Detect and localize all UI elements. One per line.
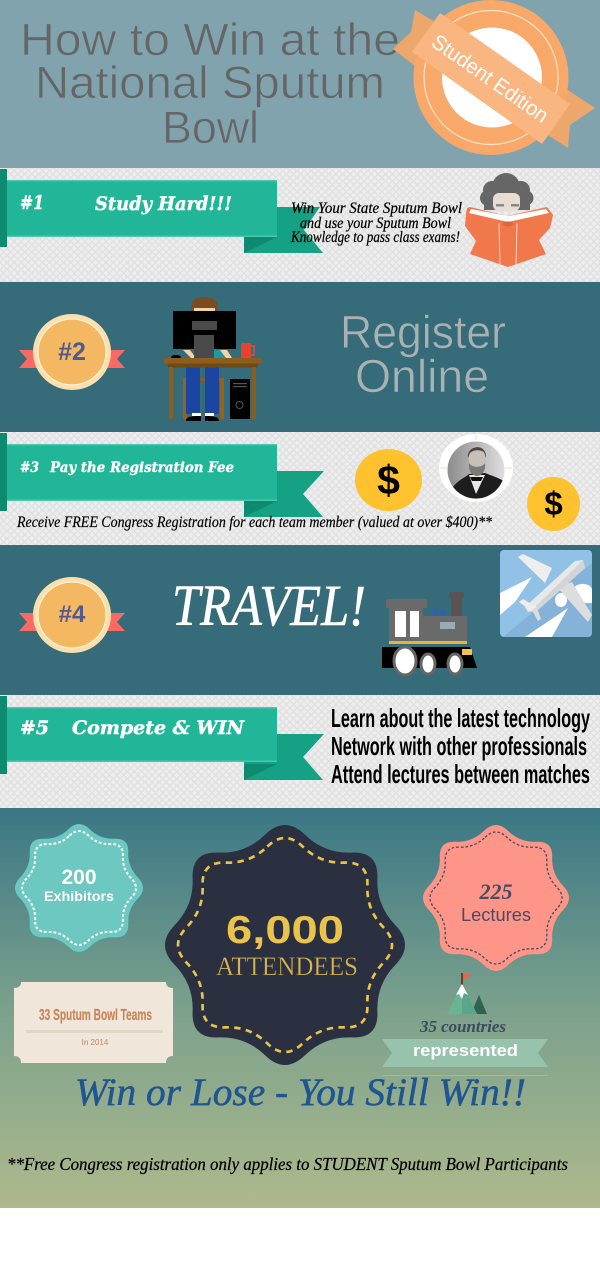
card: 33 sputum bowl teams: In 2014 bbox=[82, 1038, 109, 1047]
icon: person at computer desk bbox=[164, 297, 262, 421]
heading: win or lose: Win or Lose - You Still Win!! bbox=[75, 1071, 526, 1114]
panel: step 3 registration fee bbox=[0, 432, 600, 545]
badge: 6,000 attendees: 6,000 bbox=[226, 909, 344, 952]
badge: 200 exhibitors bbox=[15, 824, 143, 952]
ribbon: step 5 bbox=[0, 696, 324, 780]
coin: large dollar bbox=[355, 449, 422, 511]
icon: person reading book bbox=[465, 173, 553, 267]
ribbon heading: pay the fee: Pay the Registration Fee bbox=[49, 460, 234, 476]
badge: 200 exhibitors: Exhibitors bbox=[44, 888, 114, 904]
heading: register online: Register bbox=[340, 306, 506, 358]
ribbon heading: pay the fee: #3 bbox=[20, 460, 39, 476]
text: win your state: Win Your State Sputum Bowl bbox=[291, 200, 462, 217]
heading: register online bbox=[340, 306, 506, 402]
heading: register online: Online bbox=[355, 350, 489, 402]
text: win your state bbox=[290, 200, 462, 246]
badge: 200 exhibitors: 200 bbox=[61, 866, 97, 889]
title: Bowl bbox=[162, 102, 259, 153]
text: benefits list bbox=[331, 703, 590, 789]
badge: student edition: Student Edition bbox=[427, 30, 553, 128]
panel: step 1 study hard bbox=[0, 168, 600, 282]
ribbon: represented: represented bbox=[413, 1041, 518, 1060]
badge: student edition bbox=[393, 0, 595, 155]
ribbon: step 3 bbox=[0, 433, 324, 517]
text: win your state: Knowledge to pass class exams! bbox=[290, 229, 460, 246]
badge: #2 bbox=[19, 314, 125, 390]
badge: 225 lectures bbox=[423, 825, 569, 971]
ribbon heading: compete and win: #5 bbox=[20, 717, 49, 739]
badge: 225 lectures: 225 bbox=[478, 879, 512, 904]
portrait: man in medallion bbox=[439, 434, 513, 502]
badge: 6,000 attendees: ATTENDEES bbox=[216, 952, 358, 981]
footnote: **Free Congress registration only applies to STUDENT Sputum Bowl Participants bbox=[7, 1154, 568, 1174]
icon: train bbox=[382, 592, 477, 675]
title: National Sputum bbox=[35, 57, 385, 108]
badge: #4: #4 bbox=[59, 601, 86, 628]
title: How to Win at the bbox=[20, 14, 400, 65]
badge: 225 lectures: Lectures bbox=[461, 905, 531, 925]
badge: #4 bbox=[19, 577, 125, 653]
text: free congress registration: Receive FREE Congress Registration for each team member (valued at over $400)** bbox=[16, 514, 492, 531]
panel: step 4 travel bbox=[0, 545, 600, 695]
badge: #2: #2 bbox=[58, 338, 86, 366]
coin: small dollar bbox=[527, 477, 580, 531]
ribbon: represented bbox=[382, 1039, 548, 1076]
card: 33 sputum bowl teams bbox=[14, 982, 173, 1063]
panel: step 2 register online bbox=[0, 282, 600, 432]
text: 35 countries: 35 countries bbox=[419, 1017, 506, 1036]
heading: travel: TRAVEL! bbox=[172, 573, 366, 638]
icon: airplane bbox=[500, 550, 592, 637]
panel: step 5 compete bbox=[0, 695, 600, 808]
badge: 6,000 attendees bbox=[165, 825, 405, 1065]
icon: mountain with flag bbox=[447, 973, 487, 1014]
panel: statistics bbox=[0, 808, 600, 1208]
text: win your state: and use your Sputum Bowl bbox=[300, 215, 451, 232]
ribbon heading: study hard bbox=[20, 192, 232, 215]
coin: large dollar: $ bbox=[377, 457, 400, 503]
ribbon: step 1 bbox=[0, 169, 323, 253]
ribbon heading: compete and win: Compete & WIN bbox=[72, 717, 245, 739]
ribbon heading: study hard: Study Hard!!! bbox=[95, 193, 232, 215]
card: 33 sputum bowl teams: 33 Sputum Bowl Teams bbox=[39, 1007, 152, 1024]
title bbox=[20, 14, 400, 153]
ribbon heading: study hard: #1 bbox=[20, 192, 44, 214]
panel: header bbox=[0, 0, 600, 168]
coin: small dollar: $ bbox=[544, 485, 563, 522]
